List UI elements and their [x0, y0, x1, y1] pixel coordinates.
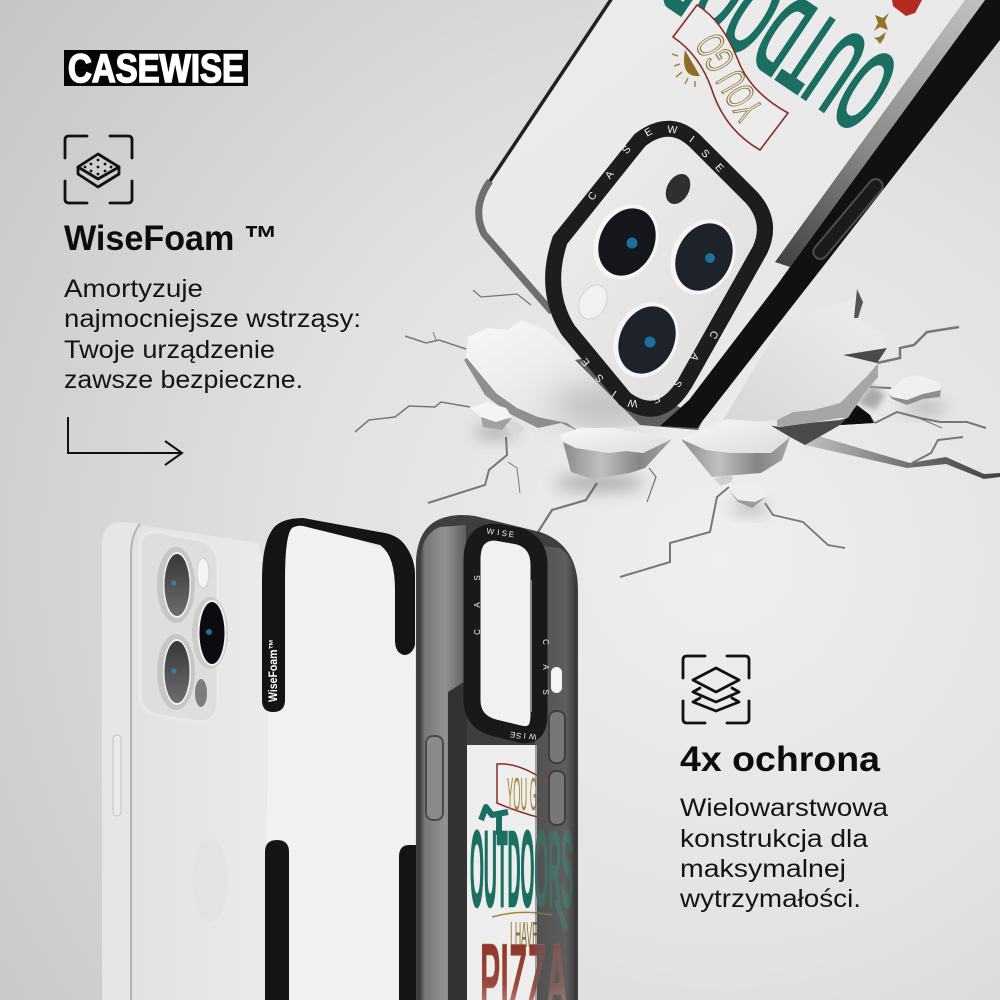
side frame [102, 522, 140, 1000]
rock: front right slab [681, 419, 790, 477]
rock: right small stone [888, 375, 941, 405]
text block: 4x ochrona description: wytrzymałości. [679, 885, 861, 913]
frame line [131, 524, 140, 1000]
back art [470, 764, 573, 1000]
back art: I HAVE [510, 914, 538, 955]
ring lettering: S [501, 529, 508, 538]
ring lettering: S [620, 144, 634, 157]
gold rule [492, 912, 552, 917]
rock: big left slab [464, 320, 650, 432]
ring lettering: E [642, 125, 655, 139]
ring lettering: A [473, 602, 482, 608]
camera lens 2 [658, 208, 748, 306]
rock: big right slab [720, 289, 887, 427]
ring lettering: I [687, 134, 696, 145]
ring lettering: I [497, 528, 500, 537]
ring lettering: E [510, 730, 516, 739]
text: YOU G [507, 768, 537, 820]
soft impact shadow [550, 389, 650, 421]
black right side of the case [660, 0, 1000, 428]
foam label: WiseFoam™ [268, 639, 280, 702]
red shape [892, 0, 922, 16]
black core of the hole [840, 405, 873, 425]
side button [113, 735, 121, 816]
ring lettering: S [698, 147, 712, 161]
ring lettering: W [627, 397, 638, 409]
left band [420, 525, 466, 1000]
gold sparkles [874, 13, 889, 44]
camera ring [472, 532, 539, 735]
text block: WiseFoam description: Amortyzuje [64, 275, 203, 303]
cover art: YOU GO OUTDOORS [664, 0, 922, 151]
shadow beside the right slab [857, 385, 885, 410]
case shell [416, 515, 578, 1000]
text block: WiseFoam description: najmocniejsze wstrząsy: [64, 305, 361, 333]
banner [497, 764, 550, 820]
ring lettering: S [516, 731, 522, 740]
text block: 4x ochrona description: maksymalnej [680, 855, 846, 883]
ring lettering: E [508, 530, 515, 539]
glossy side strip [775, 0, 985, 267]
flash [197, 558, 209, 588]
clear back [467, 745, 537, 1000]
translucent right band over art [535, 545, 576, 1000]
text block: WiseFoam description: Twoje urządzenie [64, 336, 275, 364]
right button lower [549, 771, 565, 825]
camera bumper ring [553, 129, 765, 409]
rocks: front small stones [714, 475, 766, 508]
ring lettering: S [541, 689, 550, 695]
lower right foam bar [399, 845, 418, 1000]
phone: white iPhone back [102, 522, 275, 1000]
phone body [102, 522, 275, 1000]
lower corner of the case [575, 350, 710, 430]
upper foam loop [262, 518, 415, 712]
left frame edge of the case [490, 0, 612, 181]
phone: tilted case with camera hitting the ground [479, 0, 1000, 430]
ring lettering: I [610, 388, 619, 399]
text block: 4x ochrona description: konstrukcja dla [680, 825, 868, 853]
heading: WiseFoam: WiseFoam ™ [64, 219, 278, 258]
soft shadows under rocks [473, 403, 947, 513]
lens 3 [157, 634, 195, 710]
translucent case body [479, 0, 1000, 420]
ring lettering: C [473, 629, 482, 635]
illustration: cracked floor [355, 289, 1000, 577]
lens 1 [157, 547, 195, 623]
ring lettering: I [523, 731, 526, 740]
brand logo: CASEWISE [68, 47, 244, 91]
ring highlight [530, 580, 532, 712]
text block: WiseFoam description: zawsze bezpieczne. [64, 366, 303, 394]
ring lettering: S [670, 376, 684, 389]
ring lettering: A [603, 169, 617, 182]
right button upper [549, 711, 565, 763]
crack lines [355, 290, 986, 577]
ring lettering: S [593, 371, 607, 385]
ring lettering: E [651, 392, 662, 406]
icon: foam pad in focus brackets [65, 136, 132, 203]
rock: left small stones [470, 402, 524, 437]
clear foam layer panel [265, 520, 415, 1000]
lidar sensor [573, 280, 613, 324]
sensor [195, 679, 207, 707]
ring lettering: W [667, 124, 678, 136]
flash [661, 170, 695, 208]
rock: front left slab [560, 428, 672, 479]
arrow [68, 417, 182, 465]
ring lettering: E [712, 161, 726, 175]
ring lettering: A [541, 664, 550, 670]
side button [810, 176, 886, 262]
sun rays [672, 54, 695, 87]
wide wedge crack on the right [805, 433, 1000, 479]
ring lettering: S [473, 575, 482, 581]
S tail [556, 900, 566, 930]
T crossbar flourish [481, 807, 508, 835]
ring lettering: W [528, 732, 537, 741]
logo ghost [192, 838, 228, 922]
gold sun [684, 50, 700, 76]
lower left foam bar [265, 840, 289, 1000]
ring lettering: C [541, 639, 550, 645]
ring lettering: E [579, 355, 593, 368]
text block: WiseFoam description [64, 275, 361, 394]
phone: black transparent case [416, 515, 578, 1000]
ring lettering: C [706, 328, 721, 341]
red banner [673, 5, 788, 150]
side button [426, 736, 443, 820]
icon: stacked layers in focus brackets [683, 656, 749, 723]
WiseFoam black foam strip [262, 518, 418, 1000]
rounded frame corner [479, 181, 552, 312]
lens 2 [192, 597, 228, 669]
camera lens 1 [581, 193, 671, 291]
ring lettering [579, 124, 726, 409]
heading: 4x ochrona: 4x ochrona [680, 740, 881, 779]
ring lettering [473, 527, 550, 741]
text block: 4x ochrona description [679, 794, 888, 913]
flash hole [551, 667, 562, 693]
dark hole right of the impact [767, 405, 875, 445]
camera lens 3 [601, 291, 691, 389]
text block: 4x ochrona description: Wielowarstwowa [680, 794, 888, 822]
ring lettering: A [688, 350, 701, 363]
ring lettering: W [486, 527, 495, 537]
camera plateau [140, 532, 218, 722]
ring lettering: C [585, 189, 600, 203]
dark left inner strip [448, 680, 467, 1000]
